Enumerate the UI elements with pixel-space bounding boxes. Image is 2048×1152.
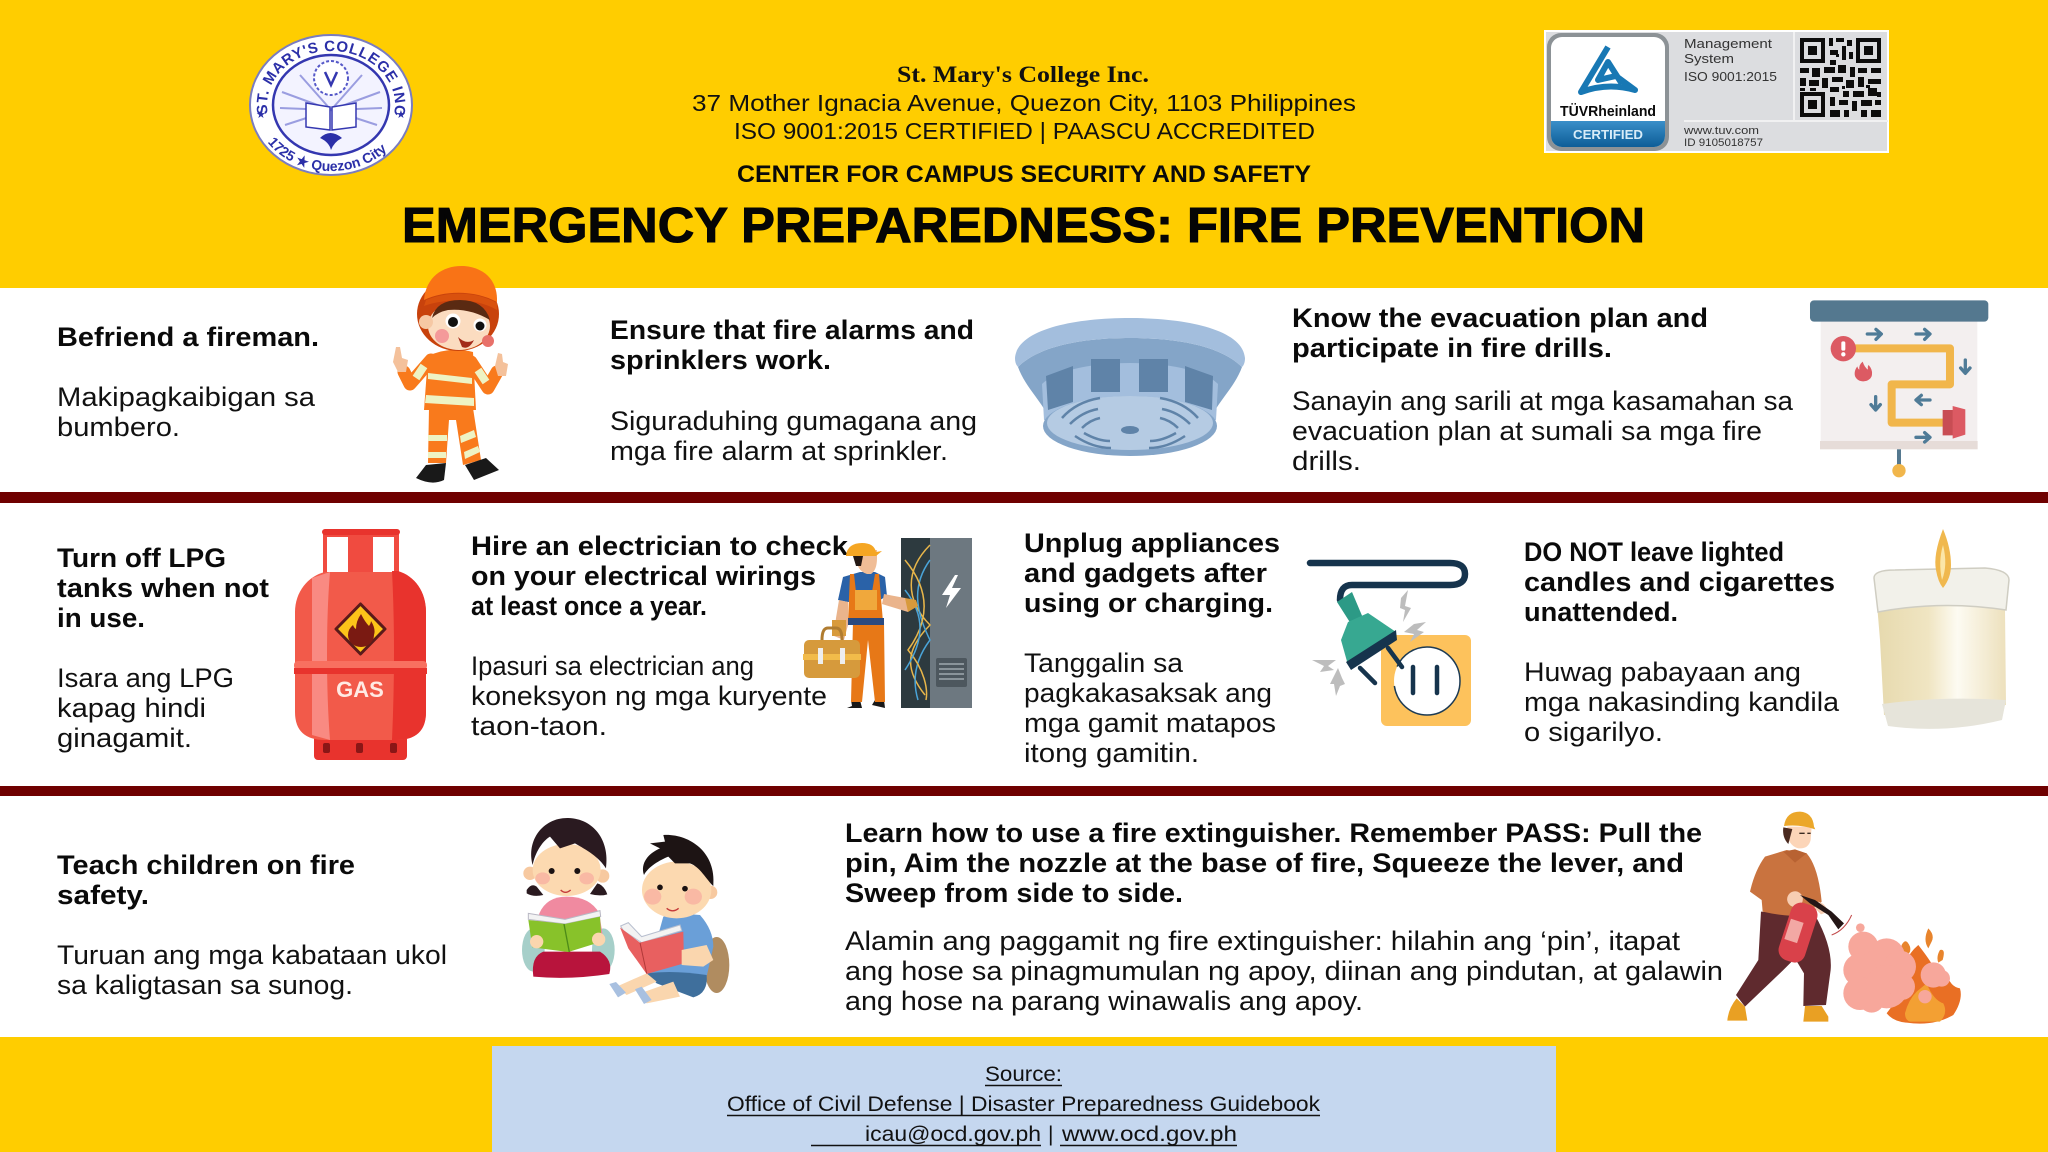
icon: evacuation plan board: [1810, 300, 1988, 477]
heading and text: unattended.: [1524, 597, 1678, 627]
header background: [0, 0, 2048, 288]
heading and text: [845, 818, 1723, 1016]
heading and text: [610, 315, 977, 466]
heading and text: pagkakasaksak ang: [1024, 678, 1272, 708]
panel: hire an electrician: [471, 531, 972, 741]
certification badge: TUV Rheinland: [1544, 30, 1889, 153]
icon: unplugged plug and socket: [1310, 563, 1471, 726]
heading and text: Hire an electrician to check: [471, 531, 849, 561]
heading and text: [57, 322, 319, 442]
heading and text: mga nakasinding kandila: [1524, 687, 1840, 717]
heading and text: Siguraduhing gumagana ang: [610, 406, 977, 436]
heading and text: Unplug appliances: [1024, 528, 1280, 558]
school name and address: ISO 9001:2015 CERTIFIED | PAASCU ACCREDITED: [734, 118, 1315, 144]
logo: St. Mary's College seal: ★: [396, 109, 406, 121]
heading and text: sprinklers work.: [610, 345, 831, 375]
certification badge: TUV Rheinland: ISO 9001:2015: [1684, 69, 1777, 84]
source box: |: [1048, 1123, 1053, 1146]
certification badge: TUV Rheinland: Management: [1684, 36, 1772, 51]
heading and text: Learn how to use a fire extinguisher. Remember PASS: Pull the: [845, 818, 1702, 848]
heading and text: Ipasuri sa electrician ang: [471, 651, 754, 681]
certification badge: TUV Rheinland: System: [1684, 51, 1734, 66]
heading and text: taon-taon.: [471, 711, 607, 741]
heading and text: Alamin ang paggamit ng fire extinguisher: hilahin ang ‘pin’, itapat: [845, 926, 1681, 956]
source box: [492, 1046, 1556, 1152]
icon: LPG gas tank: GAS: [336, 677, 384, 702]
heading and text: Turn off LPG: [57, 543, 226, 573]
heading and text: mga fire alarm at sprinkler.: [610, 436, 948, 466]
heading and text: ang hose na parang winawalis ang apoy.: [845, 986, 1363, 1016]
heading and text: Know the evacuation plan and: [1292, 303, 1708, 333]
logo: St. Mary's College seal: [249, 34, 413, 176]
title: EMERGENCY PREPAREDNESS: FIRE PREVENTION: [402, 199, 1645, 253]
heading and text: [1024, 528, 1280, 768]
heading and text: Sweep from side to side.: [845, 878, 1183, 908]
icon: candle in glass: [1874, 529, 2009, 729]
heading and text: Teach children on fire: [57, 850, 355, 880]
heading and text: participate in fire drills.: [1292, 333, 1612, 363]
school name and address: St. Mary's College Inc.: [897, 62, 1149, 87]
heading and text: on your electrical wirings: [471, 561, 816, 591]
heading and text: Tanggalin sa: [1024, 648, 1184, 678]
source box: icau@ocd.gov.ph: [865, 1123, 1041, 1146]
logo: St. Mary's College seal: ★: [256, 109, 266, 121]
certification badge: TUV Rheinland: TÜVRheinland: [1560, 103, 1656, 120]
heading and text: mga gamit matapos: [1024, 708, 1276, 738]
icon: QR code: [1800, 38, 1881, 117]
heading and text: Sanayin ang sarili at mga kasamahan sa: [1292, 386, 1794, 416]
heading and text: at least once a year.: [471, 591, 707, 621]
subheading: center name: CENTER FOR CAMPUS SECURITY AND SAFETY: [737, 161, 1311, 188]
heading and text: Turuan ang mga kabataan ukol: [57, 940, 447, 970]
heading and text: sa kaligtasan sa sunog.: [57, 970, 353, 1000]
heading and text: [1524, 537, 1840, 747]
heading and text: itong gamitin.: [1024, 738, 1199, 768]
source box: Source:: [985, 1063, 1062, 1086]
girl: [522, 818, 615, 978]
heading and text: ginagamit.: [57, 723, 192, 753]
heading and text: koneksyon ng mga kuryente: [471, 681, 827, 711]
heading and text: pin, Aim the nozzle at the base of fire, Squeeze the lever, and: [845, 848, 1684, 878]
panel: evacuation plan: [1292, 300, 1988, 477]
heading and text: o sigarilyo.: [1524, 717, 1663, 747]
heading and text: [471, 531, 849, 741]
panel: unplug appliances: [1024, 528, 1471, 768]
heading and text: bumbero.: [57, 412, 180, 442]
certification badge: TUV Rheinland: CERTIFIED: [1573, 127, 1643, 142]
heading and text: ang hose sa pinagmumulan ng apoy, diinan ang pindutan, at galawin: [845, 956, 1723, 986]
heading and text: [57, 850, 447, 1000]
heading and text: Ensure that fire alarms and: [610, 315, 974, 345]
row backgrounds: [0, 288, 2048, 1152]
school name and address: [692, 62, 1356, 144]
heading and text: drills.: [1292, 446, 1361, 476]
boy: [609, 835, 729, 1004]
heading and text: safety.: [57, 880, 149, 910]
heading and text: candles and cigarettes: [1524, 567, 1835, 597]
panel: fire alarms and sprinklers: [610, 315, 1245, 466]
icon: LPG gas tank: [294, 529, 427, 760]
icon: electrician at electrical panel: [803, 538, 972, 708]
heading and text: [1292, 303, 1794, 476]
heading and text: using or charging.: [1024, 588, 1273, 618]
icon: children reading books: [522, 818, 729, 1004]
icon: smoke detector: [1015, 318, 1245, 456]
heading and text: kapag hindi: [57, 693, 206, 723]
source box: Office of Civil Defense | Disaster Preparedness Guidebook: [727, 1093, 1321, 1116]
heading and text: DO NOT leave lighted: [1524, 537, 1784, 567]
heading and text: and gadgets after: [1024, 558, 1268, 588]
heading and text: evacuation plan at sumali sa mga fire: [1292, 416, 1762, 446]
icon: person using fire extinguisher: [1727, 812, 1961, 1024]
heading and text: in use.: [57, 603, 145, 633]
school name and address: 37 Mother Ignacia Avenue, Quezon City, 1103 Philippines: [692, 90, 1356, 116]
heading and text: tanks when not: [57, 573, 269, 603]
heading and text: Isara ang LPG: [57, 663, 234, 693]
source box: www.ocd.gov.ph: [1061, 1123, 1237, 1146]
heading and text: Befriend a fireman.: [57, 322, 319, 352]
heading and text: Makipagkaibigan sa: [57, 382, 316, 412]
panel: fire extinguisher PASS: [845, 812, 1961, 1024]
panel: LPG tanks: [57, 529, 427, 760]
heading and text: Huwag pabayaan ang: [1524, 657, 1801, 687]
certification badge: TUV Rheinland: ID 9105018757: [1684, 137, 1763, 149]
panel: befriend a fireman: [57, 266, 508, 483]
panel: teach children: [57, 818, 729, 1004]
icon: cartoon fireman: [393, 266, 508, 483]
certification badge: TUV Rheinland: www.tuv.com: [1683, 125, 1759, 137]
panel: candles and cigarettes: [1524, 529, 2009, 747]
logo: St. Mary's College seal: 1725 ★ Quezon City: [268, 138, 386, 173]
heading and text: [57, 543, 269, 753]
